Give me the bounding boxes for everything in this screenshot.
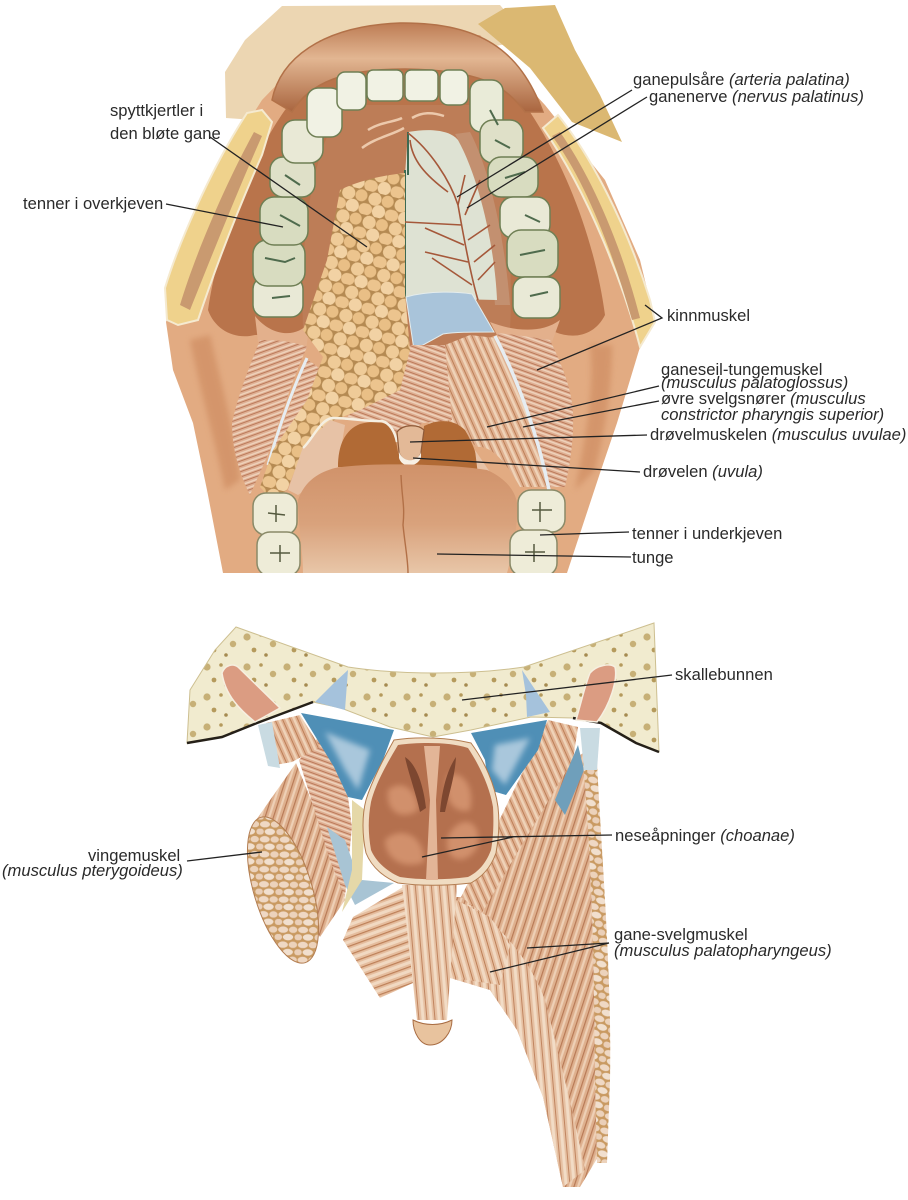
palate: [302, 105, 511, 350]
label: skallebunnen: [462, 665, 773, 700]
label: gane-svelgmuskel: [490, 925, 832, 972]
label: gane-svelgmuskel: gane-svelgmuskel: [614, 925, 748, 944]
label: ganeseil-tungemuskel: [487, 360, 848, 427]
right cheek fat: [543, 115, 655, 347]
palate shadows: [405, 132, 408, 298]
ochre tissue top right: [478, 5, 622, 142]
left cheek fat: [165, 110, 272, 325]
label: tenner i underkjeven: [540, 524, 782, 543]
label: drøvelmuskelen: [410, 425, 906, 444]
blue bone patch left: [315, 670, 348, 710]
label: tenner i overkjeven: tenner i overkjeven: [23, 194, 163, 213]
label: tunge: tunge: [632, 548, 674, 567]
label: tenner i overkjeven: [23, 194, 283, 227]
central palate band: [402, 885, 457, 1020]
right strap muscle: [461, 720, 578, 913]
lower right brown strip: [455, 132, 510, 305]
uvula: [397, 426, 424, 461]
left upper small muscle: [266, 715, 320, 765]
label: drøvelmuskelen: drøvelmuskelen (musculus uvulae): [650, 425, 906, 444]
label: neseåpninger: [422, 826, 795, 857]
blue cartilage right: [471, 720, 547, 795]
label: tunge: [437, 548, 674, 567]
white pharyngeal folds: [495, 336, 549, 490]
lateral pharynx muscle: [447, 753, 598, 1187]
left pterygoid muscle: [254, 763, 345, 937]
face and cheek tissue: [166, 35, 655, 573]
soft palate muscle: [345, 345, 452, 432]
palatine glands: [260, 173, 410, 500]
thin yellow ligament: [342, 800, 365, 912]
blue tendon of palate: [406, 292, 494, 350]
blue bone patch right: [522, 670, 550, 717]
left cheek inner streak: [180, 132, 262, 310]
right cheek muscle: [497, 333, 573, 487]
blue cartilage right highlight: [492, 738, 530, 785]
label: ganeseil-tungemuskel: ganeseil-tungemuskel: [661, 360, 822, 379]
pale tissue above lip: [225, 5, 530, 120]
left pillar of fauces: [288, 420, 345, 495]
small blue fascia near choanae: [327, 827, 394, 905]
label: øvre svelgsnører: [523, 389, 884, 427]
label: spyttkjertler: [110, 101, 367, 247]
label: kinnmuskel: kinnmuskel: [667, 306, 750, 325]
choanae frame: [363, 738, 499, 885]
label: ganepulsåre: ganepulsåre (arteria palatina): [633, 70, 850, 89]
skull base lower black edge: [187, 702, 659, 752]
left medial fan: [275, 360, 319, 447]
left strap muscle: [299, 735, 352, 897]
upper teeth: [253, 70, 560, 318]
left molar underside ridge: [255, 316, 308, 346]
illustration: open mouth seen from the front: [165, 5, 655, 576]
pink bone opening left: [222, 665, 280, 722]
label: drøvelen: drøvelen (uvula): [643, 462, 763, 481]
tongue: [298, 464, 517, 573]
throat opening: [338, 421, 478, 470]
palatine nerve and artery branches: [405, 133, 495, 300]
illustration: soft palate seen from behind: [187, 623, 659, 1187]
tendon strip under skull: [580, 728, 600, 770]
tooth fissures: [265, 110, 548, 298]
medial pharyngeal fan: [428, 335, 548, 487]
label: skallebunnen: skallebunnen: [675, 665, 773, 684]
label: kinnmuskel: [537, 305, 750, 370]
right palate fan: [447, 897, 510, 985]
blue fascia beside right strap: [555, 745, 584, 815]
label: ganenerve: ganenerve (nervus palatinus): [649, 87, 864, 106]
right tonsil: [475, 450, 489, 471]
pterygoid muscle cut end: [233, 809, 333, 971]
label: neseåpninger: neseåpninger (choanae): [615, 826, 795, 845]
long palatopharyngeus muscle: [447, 905, 585, 1187]
blue cartilage left highlight: [325, 732, 370, 790]
label: vingemuskel: (musculus pterygoideus): [2, 861, 183, 880]
outer fatty strip: [583, 763, 610, 1163]
label: ganeseil-tungemuskel: (musculus palatoglossus): [661, 373, 848, 392]
nasal septum: [424, 746, 440, 880]
label: gane-svelgmuskel: (musculus palatopharyngeus): [614, 941, 832, 960]
label: øvre svelgsnører: øvre svelgsnører (musculus: [661, 389, 866, 408]
pale blue fascia left: [258, 722, 280, 768]
right cheek inner streak: [552, 132, 640, 320]
palate mucosa cream right half: [405, 130, 497, 300]
lower tooth fissures: [268, 502, 552, 562]
label: tenner i underkjeven: tenner i underkjeven: [632, 524, 782, 543]
nasal conchae light: [385, 774, 478, 865]
label: øvre svelgsnører: constrictor pharyngis superior): [661, 405, 884, 424]
skull base bone: [187, 623, 659, 752]
blue cartilage left: [301, 713, 394, 800]
palatal rugae highlights: [362, 113, 444, 148]
pink bone opening right: [576, 665, 616, 722]
nasal interior: [369, 743, 493, 879]
left palate wing: [343, 887, 413, 998]
label: spyttkjertler: spyttkjertler i: [110, 101, 203, 120]
label: vingemuskel: [2, 846, 262, 880]
label: ganepulsåre: [457, 70, 850, 197]
tongue midline: [401, 475, 408, 573]
label: ganenerve: [467, 87, 864, 208]
lower teeth: [253, 490, 565, 576]
darker folds on cheek: [190, 335, 612, 490]
label: drøvelen: [413, 458, 763, 481]
soft palate white edge: [303, 418, 397, 448]
uvula from behind: [413, 1020, 452, 1045]
left cheek muscle: [232, 340, 307, 495]
label: vingemuskel: vingemuskel: [88, 846, 180, 865]
brown arch between cheek and teeth: [208, 58, 605, 336]
upper lip: [272, 23, 543, 112]
label: spyttkjertler: den bløte gane: [110, 124, 221, 143]
nasal shadow: [405, 757, 456, 812]
